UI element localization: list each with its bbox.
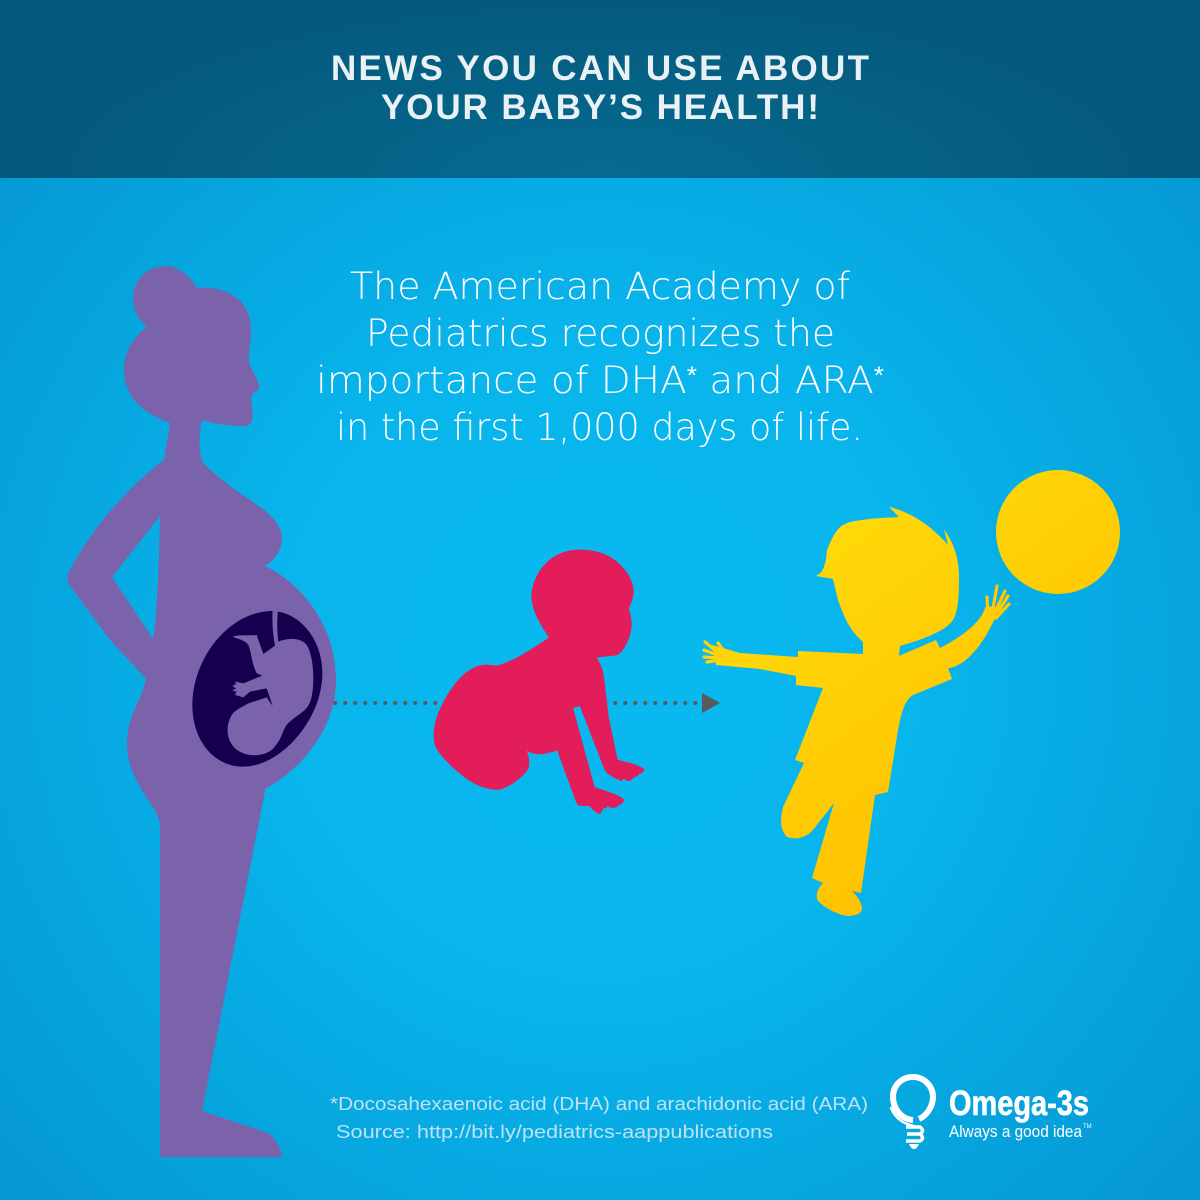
footnote and source	[330, 1093, 868, 1142]
crawling baby silhouette	[434, 550, 644, 813]
header band	[0, 0, 1200, 178]
pregnant mother silhouette	[68, 266, 336, 1157]
title	[331, 49, 869, 127]
logo wordmark: Omega-3s	[949, 1084, 1089, 1123]
main message: *	[687, 362, 697, 390]
running boy silhouette	[704, 507, 1009, 916]
title: NEWS YOU CAN USE ABOUT	[331, 49, 869, 88]
mother body	[68, 266, 336, 1157]
main message: and ARA	[697, 359, 874, 402]
main message: *	[874, 362, 884, 390]
footnote and source: Source: http://bit.ly/pediatrics-aappublications	[336, 1121, 773, 1142]
main message	[316, 265, 884, 449]
logo tagline: Always a good idea	[949, 1122, 1082, 1141]
main message: in the first 1,000 days of life.	[336, 406, 863, 449]
main message: Pediatrics recognizes the	[366, 312, 835, 355]
main message: importance of DHA	[316, 359, 668, 402]
dotted arrow	[335, 693, 720, 713]
icon: light bulb	[891, 1077, 933, 1149]
footnote and source: *Docosahexaenoic acid (DHA) and arachidonic acid (ARA)	[330, 1093, 868, 1114]
title: YOUR BABY’S HEALTH!	[381, 88, 819, 127]
womb with fetus	[192, 610, 322, 767]
trademark: TM	[1083, 1124, 1092, 1130]
boy hands fingers	[704, 586, 1009, 662]
logo: Omega-3s	[891, 1077, 1092, 1149]
boy body	[712, 507, 1000, 916]
ball	[996, 470, 1120, 594]
main message: The American Academy of	[350, 265, 850, 308]
